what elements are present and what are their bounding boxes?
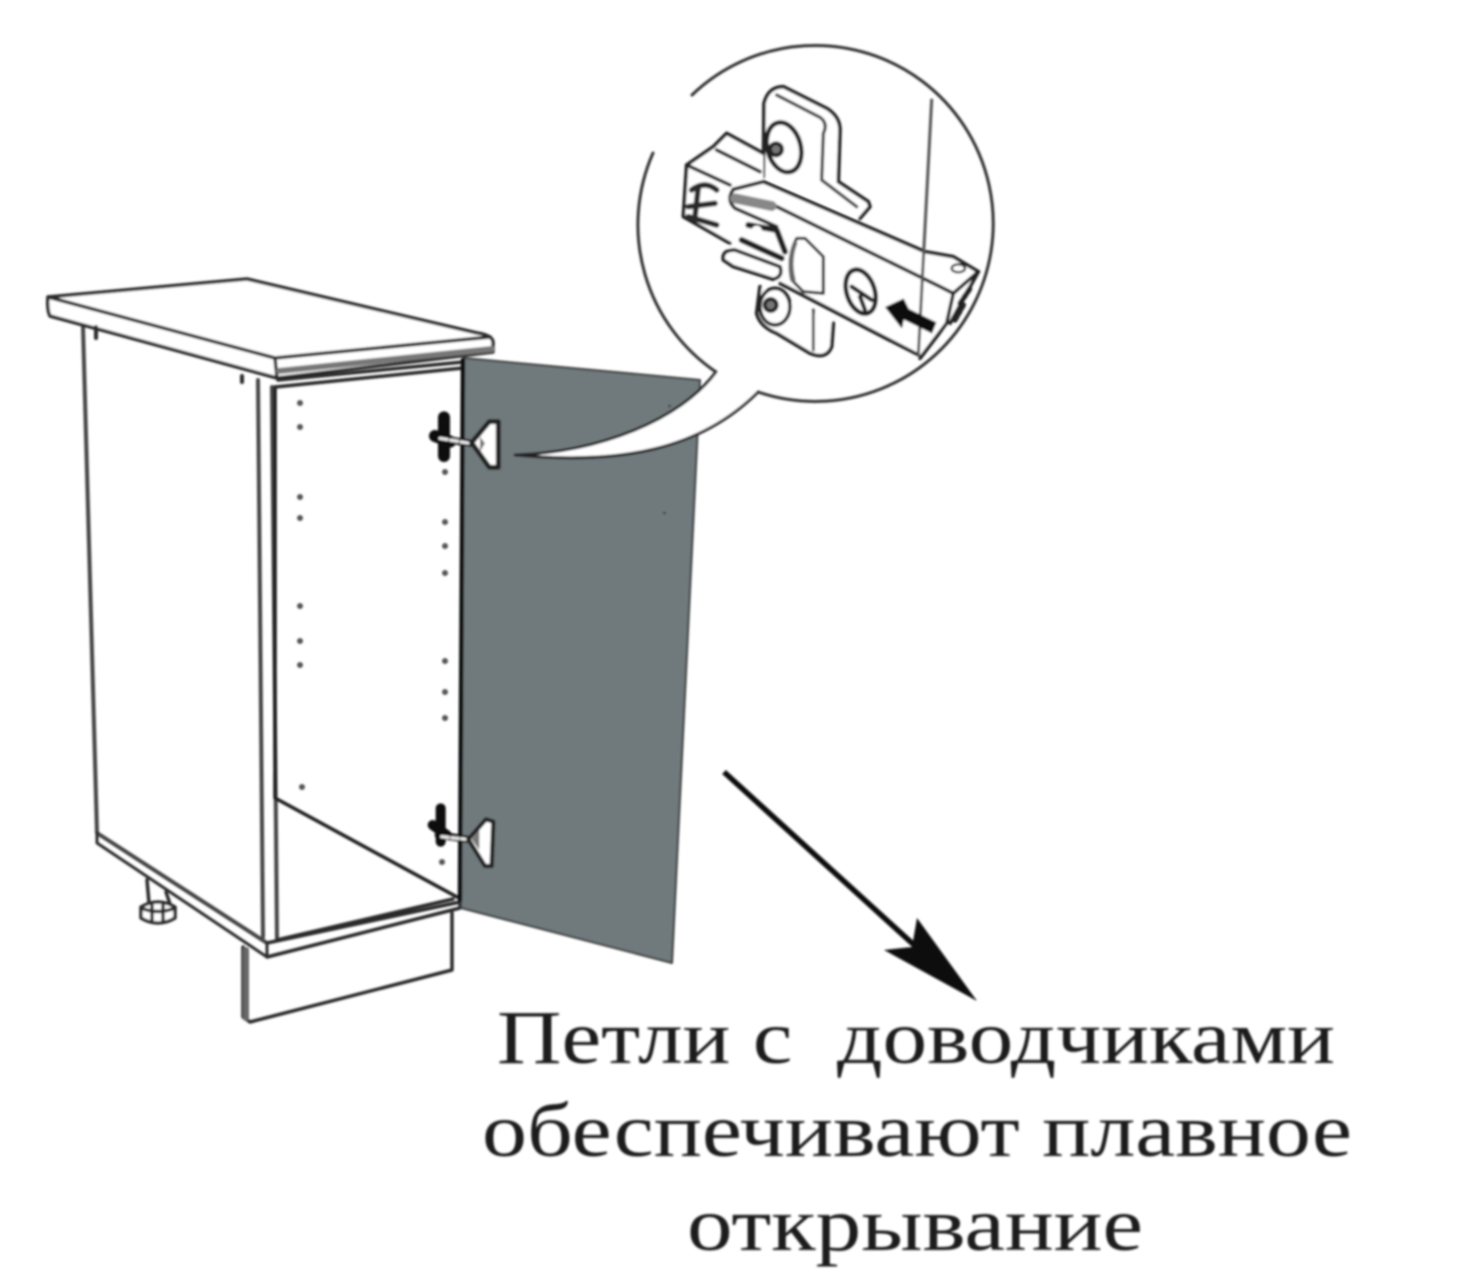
hinge knob — [435, 417, 450, 456]
arm screw — [840, 266, 881, 318]
left housing — [683, 133, 763, 243]
lower mounting plate — [757, 287, 833, 356]
door dots — [664, 406, 670, 513]
centre bracket — [790, 238, 823, 293]
upper hinge — [435, 417, 498, 467]
arm outlines — [730, 182, 978, 355]
door — [461, 358, 700, 963]
hinge detail in callout — [683, 87, 978, 358]
countertop front edges — [48, 297, 490, 378]
caption: обеспечивают плавное — [482, 1089, 1352, 1173]
caption: Петли с доводчиками — [497, 996, 1335, 1080]
black direction arrow — [886, 299, 936, 333]
latch cams — [742, 225, 785, 258]
hinge knob — [433, 808, 447, 842]
countertop — [48, 279, 493, 378]
upper mounting plate — [763, 87, 870, 218]
shelf peg holes — [297, 400, 448, 865]
cabinet illustration — [48, 45, 993, 1022]
callout circle — [638, 45, 993, 401]
main hinge arm — [683, 133, 978, 358]
plinth board — [243, 913, 452, 1022]
door edge line — [918, 100, 932, 355]
left housing texture — [688, 185, 717, 225]
lower plate inner line — [809, 310, 818, 350]
hinge arm highlight — [440, 438, 470, 443]
hinge plate — [472, 422, 498, 467]
cam opening — [751, 226, 762, 238]
hinge plate inner — [472, 830, 479, 850]
inner top edge and back line — [275, 387, 457, 897]
hinge plate inner — [480, 437, 485, 452]
door hinge edge — [460, 360, 463, 900]
callout tail — [515, 372, 758, 458]
lower hinge — [433, 808, 493, 866]
lower latch — [723, 250, 781, 279]
grey slot — [735, 198, 772, 206]
arm rim hole — [952, 264, 965, 272]
front post — [258, 380, 277, 940]
upper screw — [761, 119, 807, 176]
arm end — [920, 272, 978, 358]
hinge arm — [438, 438, 472, 443]
centre bracket shadow — [791, 243, 795, 280]
caption — [482, 996, 1352, 1267]
cabinet floor strip — [267, 899, 460, 957]
hinge plate — [468, 819, 493, 866]
arm end texture — [955, 288, 970, 320]
inner rail — [275, 362, 463, 387]
bottom side strip — [97, 833, 267, 957]
caption: открывание — [687, 1183, 1143, 1267]
hinge arm — [438, 835, 468, 839]
cabinet side panel — [83, 327, 267, 943]
plinth shaded edge — [243, 950, 249, 1018]
callout tail outline — [515, 372, 758, 458]
hinge arm highlight — [442, 837, 467, 839]
plate inner lines — [777, 95, 857, 207]
large arrow — [724, 772, 977, 1001]
adjustable foot — [141, 880, 175, 923]
lower screw — [760, 288, 790, 325]
small brackets — [96, 327, 242, 382]
shaded rail under countertop — [279, 349, 492, 371]
